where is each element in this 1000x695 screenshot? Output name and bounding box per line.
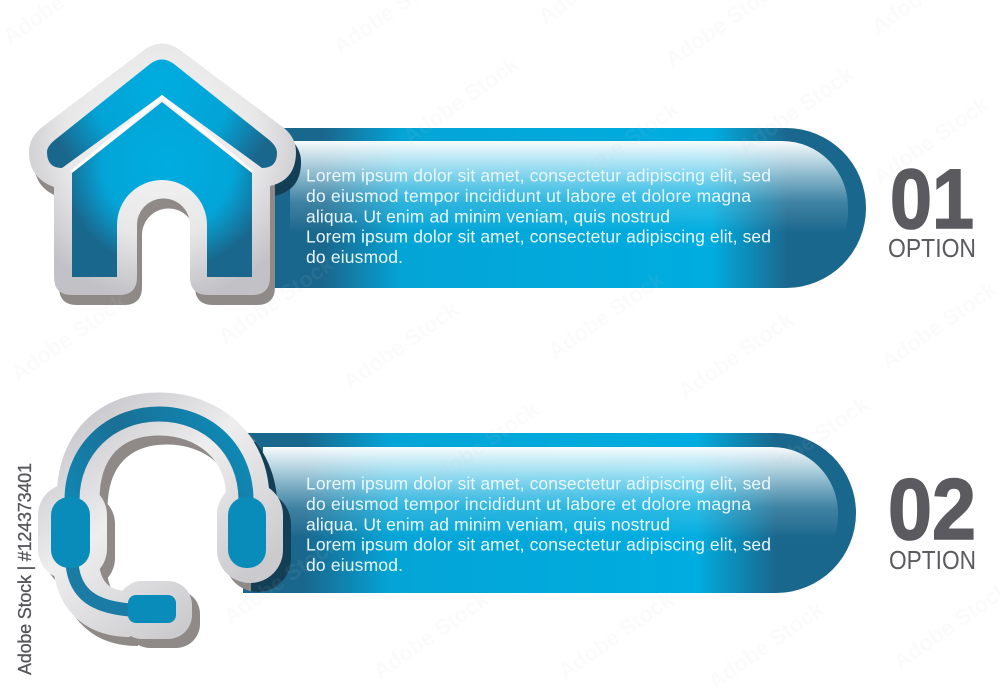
watermark pattern: Adobe Stock xyxy=(877,276,1000,374)
banner 2 text: Lorem ipsum dolor sit amet, consectetur adipiscing elit, sed xyxy=(306,534,771,554)
number 02: 02 xyxy=(888,462,976,558)
banner 1 text: aliqua. Ut enim ad minim veniam, quis nostrud xyxy=(306,206,670,226)
watermark pattern: Adobe Stock xyxy=(674,306,799,404)
banner 2 text: Lorem ipsum dolor sit amet, consectetur adipiscing elit, sed xyxy=(306,474,771,494)
watermark pattern: Adobe Stock xyxy=(399,51,524,149)
icon: house xyxy=(29,44,301,305)
watermark pattern: Adobe Stock xyxy=(544,266,669,364)
watermark pattern: Adobe Stock xyxy=(749,391,874,489)
icon: headset xyxy=(38,414,291,648)
panel: option 2 xyxy=(38,414,976,648)
banner 2 text: do eiusmod. xyxy=(306,555,403,575)
banner 2 text: do eiusmod tempor incididunt ut labore et dolore magna xyxy=(306,494,751,514)
banner 2 text xyxy=(306,474,771,575)
watermark pattern: Adobe Stock xyxy=(219,531,344,629)
watermark pattern: Adobe Stock xyxy=(704,596,829,694)
watermark pattern: Adobe Stock xyxy=(369,586,494,684)
banner 1 text: Lorem ipsum dolor sit amet, consectetur adipiscing elit, sed xyxy=(306,166,771,186)
watermark pattern: Adobe Stock xyxy=(559,96,684,194)
stock id vertical text: Adobe Stock | #124373401 xyxy=(15,463,35,675)
banner 1 text: Lorem ipsum dolor sit amet, consectetur adipiscing elit, sed xyxy=(306,226,771,246)
watermark pattern: Adobe Stock xyxy=(339,296,464,394)
watermark pattern: Adobe Stock xyxy=(554,586,679,684)
banner 1 text: do eiusmod tempor incididunt ut labore et dolore magna xyxy=(306,186,751,206)
watermark pattern: Adobe Stock xyxy=(214,251,339,349)
label: option 2: OPTION xyxy=(889,545,976,575)
banner 1 text xyxy=(306,166,771,267)
banner 1 xyxy=(270,128,866,288)
panel: option 1 xyxy=(29,44,976,305)
watermark pattern: Adobe Stock xyxy=(7,288,132,386)
watermark pattern: Adobe Stock xyxy=(734,61,859,159)
number 01: 01 xyxy=(890,152,974,246)
banner 2 xyxy=(243,433,856,593)
watermark pattern: Adobe Stock xyxy=(419,396,544,494)
watermark pattern: Adobe Stock xyxy=(869,91,994,189)
banner 1 text: do eiusmod. xyxy=(306,247,403,267)
label: option 1: OPTION xyxy=(888,233,976,263)
banner 2 text: aliqua. Ut enim ad minim veniam, quis nostrud xyxy=(306,514,670,534)
